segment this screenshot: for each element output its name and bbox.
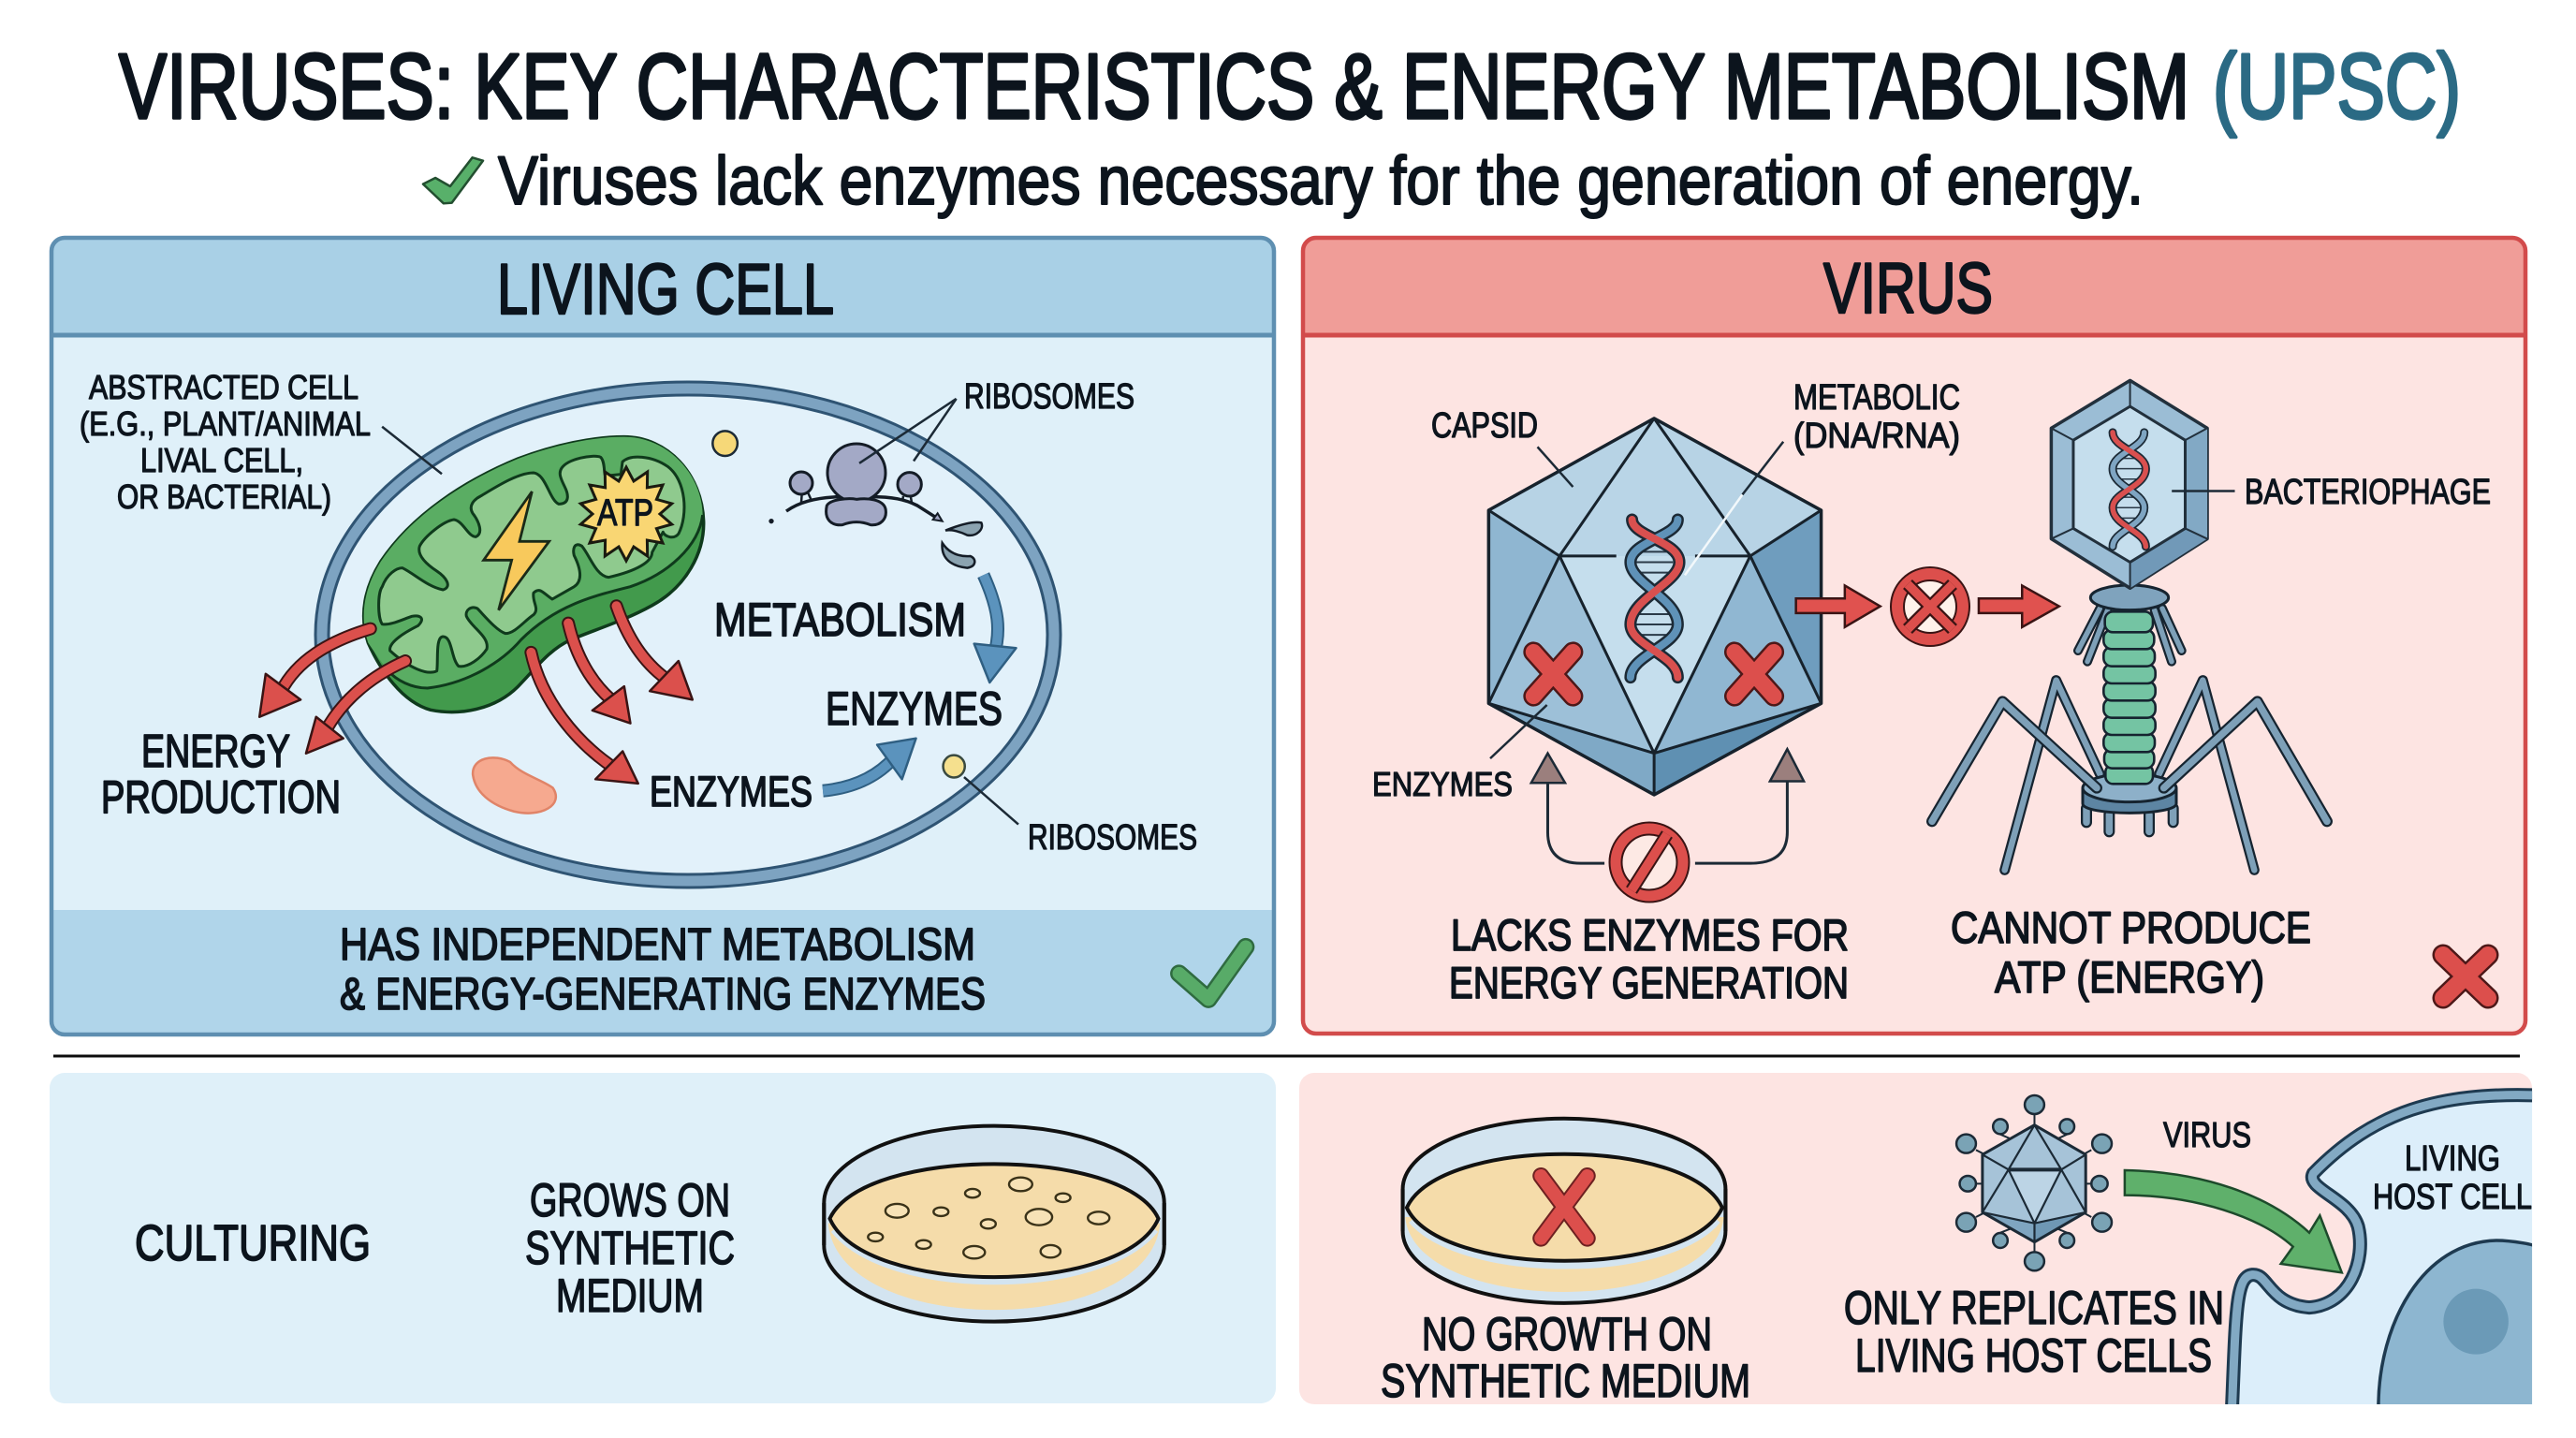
label: metabolic dna/rna [1793, 378, 1960, 456]
caption: cannot produce atp: CANNOT PRODUCE [1951, 902, 2311, 952]
capsid icosahedron [1488, 418, 1822, 795]
panel: virus [1303, 238, 2525, 1034]
summary: living cell: HAS INDEPENDENT METABOLISM [340, 920, 975, 970]
panel: culturing virus [1299, 1073, 2537, 1407]
label: living host cell: HOST CELL [2373, 1178, 2532, 1217]
label: living host cell [2373, 1139, 2532, 1217]
summary: living cell [340, 920, 986, 1020]
dna helix [1631, 520, 1679, 678]
title: (UPSC) [2213, 35, 2461, 138]
label: enzymes: ENZYMES [1372, 765, 1513, 803]
caption: lacks enzymes: LACKS ENZYMES FOR [1451, 910, 1849, 960]
label: energy production: PRODUCTION [101, 772, 341, 823]
label: enzymes lower: ENZYMES [650, 768, 812, 815]
icon: ATP star [580, 467, 672, 561]
label: virus: VIRUS [2163, 1116, 2251, 1155]
caption: no growth: NO GROWTH ON [1422, 1308, 1712, 1360]
icon: ATP star: ATP [597, 492, 653, 534]
label: ribosomes bottom: RIBOSOMES [1028, 818, 1197, 858]
caption: only replicates [1844, 1282, 2224, 1382]
label: living host cell: LIVING [2405, 1139, 2500, 1179]
red crosses on enzymes [1533, 652, 1774, 697]
virus particle [1956, 1095, 2112, 1270]
label: grows on synthetic medium: MEDIUM [556, 1269, 704, 1322]
panel: living cell [51, 238, 1274, 1034]
label: grows on synthetic medium: GROWS ON [530, 1174, 730, 1226]
blue arrows [823, 575, 1016, 791]
leader lines [382, 399, 1018, 825]
caption: lacks enzymes: ENERGY GENERATION [1449, 958, 1849, 1007]
caption: no growth: SYNTHETIC MEDIUM [1381, 1355, 1750, 1407]
mitochondrion [364, 437, 704, 712]
label: grows on synthetic medium: SYNTHETIC [525, 1222, 735, 1274]
label: enzymes upper: ENZYMES [826, 682, 1003, 735]
panel: culturing living cell [50, 1073, 1276, 1403]
label: energy production: ENERGY [141, 726, 290, 777]
caption: only replicates: LIVING HOST CELLS [1855, 1329, 2212, 1382]
caption: only replicates: ONLY REPLICATES IN [1844, 1282, 2224, 1334]
caption: cannot produce atp: ATP (ENERGY) [1995, 952, 2264, 1002]
label: metabolic dna/rna: METABOLIC [1793, 378, 1960, 418]
small organelles [473, 431, 965, 814]
icon: big red cross [2443, 955, 2488, 998]
caption: cannot produce atp [1951, 902, 2311, 1002]
arrows with blocked symbol [1796, 574, 2059, 639]
heading: living cell: LIVING CELL [497, 250, 834, 330]
nucleus [2378, 1240, 2537, 1407]
label: abstracted cell: LIVAL CELL, [140, 441, 303, 479]
label: grows on synthetic medium [525, 1174, 735, 1322]
ribosome cluster [768, 444, 982, 568]
subtitle: Viruses lack enzymes necessary for the generation of energy. [498, 143, 2144, 219]
label: metabolic dna/rna: (DNA/RNA) [1793, 417, 1960, 456]
caption: no growth [1381, 1308, 1750, 1407]
petri dish no growth [1403, 1119, 1725, 1303]
label: culturing: CULTURING [135, 1215, 371, 1271]
icon: red cross [1541, 1176, 1588, 1239]
icon: lightning bolt [484, 492, 549, 610]
red arrows from mitochondrion [259, 606, 693, 784]
label: abstracted cell: OR BACTERIAL) [117, 477, 331, 516]
heading: virus: VIRUS [1823, 249, 1993, 329]
label: ribosomes top: RIBOSOMES [964, 377, 1134, 417]
icon: check mark [1179, 946, 1246, 999]
green arrow into host cell [2125, 1170, 2342, 1272]
tail and legs [1932, 585, 2327, 870]
summary: living cell: & ENERGY-GENERATING ENZYMES [340, 970, 986, 1020]
cell membrane [322, 389, 1054, 881]
leader lines [1490, 442, 1783, 758]
label: capsid: CAPSID [1431, 406, 1538, 446]
label: abstracted cell [80, 368, 371, 516]
label: abstracted cell: (E.G., PLANT/ANIMAL [80, 404, 371, 443]
label: bacteriophage: BACTERIOPHAGE [2245, 473, 2491, 512]
caption: lacks enzymes [1449, 910, 1849, 1007]
head [2051, 380, 2235, 588]
petri dish with colonies [824, 1126, 1164, 1322]
living host cell [2232, 1095, 2537, 1407]
label: abstracted cell: ABSTRACTED CELL [89, 368, 359, 406]
bacteriophage [1932, 380, 2327, 870]
label: energy production [101, 726, 341, 823]
label: metabolism: METABOLISM [714, 594, 966, 646]
no-enzymes symbol with arrows [1531, 749, 1804, 896]
icon: green check [423, 157, 483, 203]
inner membrane folds [379, 456, 684, 672]
